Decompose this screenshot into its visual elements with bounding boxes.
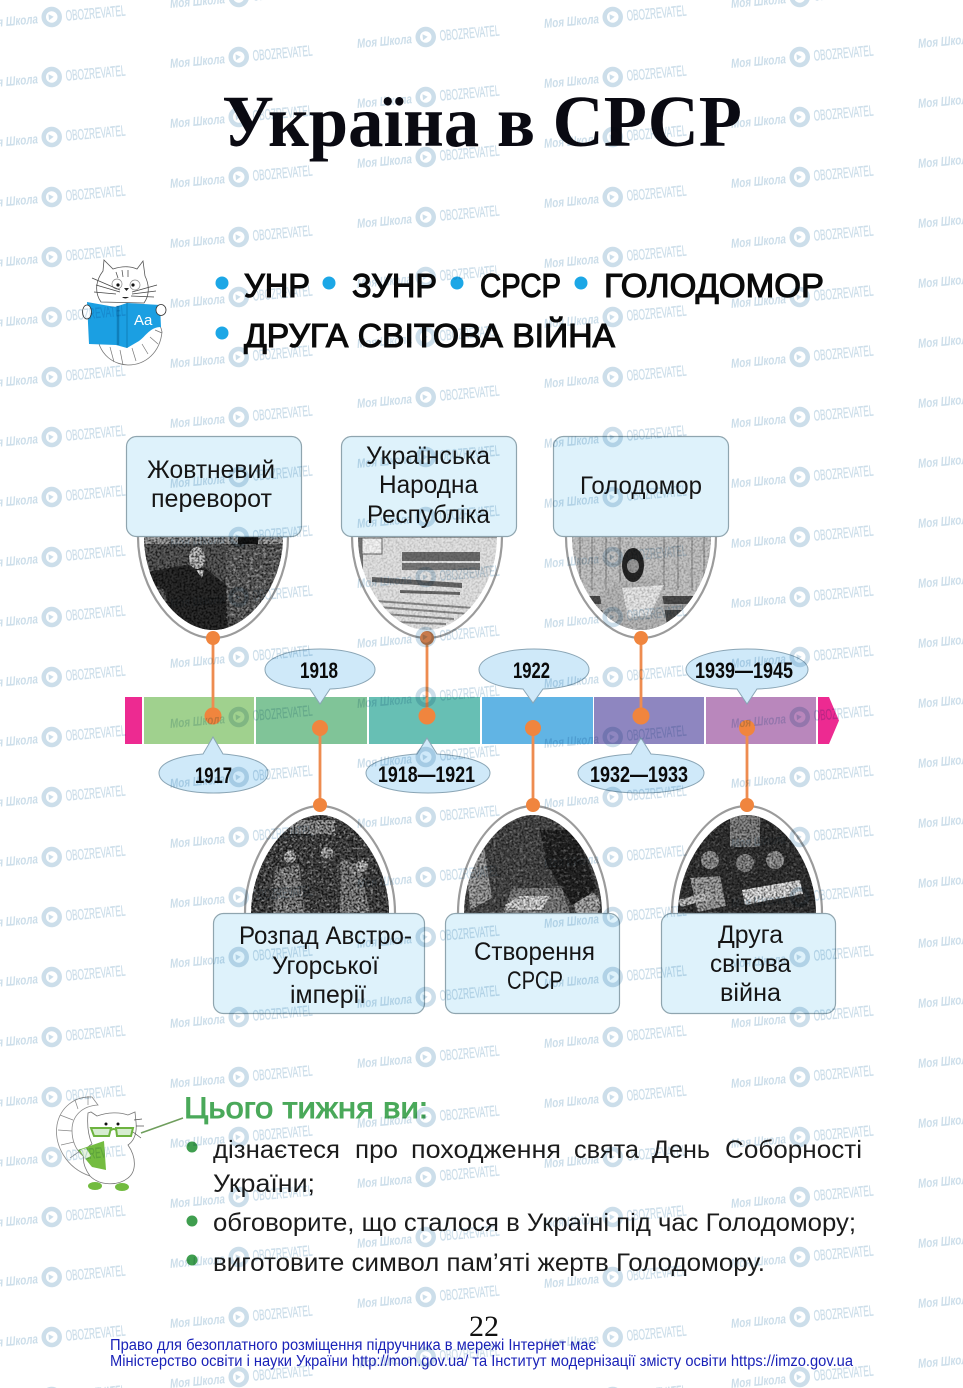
title: Україна в СРСР <box>222 81 742 162</box>
date bubble: 1932–1933 <box>578 738 704 793</box>
keyword list: ЗУНР <box>352 267 437 304</box>
keyword list: ГОЛОДОМОР <box>604 267 824 304</box>
date bubble: 1918: 1918 <box>300 658 338 683</box>
bullet: first goal <box>186 1136 862 1198</box>
label box: Розпад Австро-Угорської імперії: Розпад Австро- <box>239 922 412 950</box>
label box: Друга світова війна: світова <box>710 950 791 978</box>
date bubble: 1939–1945 <box>686 649 808 704</box>
label box: Створення СРСР: Створення <box>474 938 595 966</box>
date bubble: 1917 <box>159 737 268 793</box>
label box: Розпад Австро-Угорської імперії: імперії <box>290 981 366 1009</box>
connector: 1918 <box>312 720 328 812</box>
keyword list: СРСР <box>480 267 561 304</box>
date bubble: 1918–1921 <box>366 738 490 793</box>
photo: Ukrainian People's Republic newspaper <box>352 530 502 638</box>
footer notice: Право для безоплатного розміщення підручника в мережі Інтернет має <box>110 1337 596 1354</box>
label box: Створення СРСР <box>446 914 620 1014</box>
bullet: second goal: обговорите, що сталося в Україні під час Голодомору; <box>213 1209 856 1237</box>
bullet: first goal: Соборності <box>725 1136 862 1164</box>
photo: Second World War soldiers <box>672 806 822 920</box>
label box: Українська Народна Республіка: Республіка <box>367 501 490 529</box>
label box: Жовтневий переворот <box>126 436 302 536</box>
photo: Holodomor child <box>566 530 716 638</box>
footer notice: Міністерство освіти і науки України http://mon.gov.ua/ та Інститут модернізації змісту освіти https://imzo.gov.ua <box>110 1353 853 1370</box>
bullet: first goal: свята <box>574 1136 639 1164</box>
label box: Друга світова війна: війна <box>720 979 781 1007</box>
label box: Українська Народна Республіка: Українська <box>366 442 490 470</box>
bullet: first goal: походження <box>411 1136 561 1164</box>
bullet: first goal: День <box>652 1136 710 1164</box>
date bubble: 1939–1945: 1939—1945 <box>695 658 793 683</box>
label box: Розпад Австро-Угорської імперії: Угорської <box>272 952 379 980</box>
icon: teacher cat with pointer <box>57 1096 183 1191</box>
footer notice <box>110 1337 853 1370</box>
bullet: first goal: України; <box>213 1170 315 1198</box>
label box: Жовтневий переворот: Жовтневий <box>147 456 275 484</box>
icon: reading cat with blue book: Aa <box>134 312 153 329</box>
timeline bar <box>125 697 839 744</box>
bullet: first goal: дізнаєтеся <box>213 1136 340 1164</box>
heading: this week: Цього тижня ви: <box>184 1092 428 1125</box>
page number: 22 <box>469 1310 499 1343</box>
date bubble: 1917: 1917 <box>195 763 232 788</box>
bullet: first goal: про <box>355 1136 398 1164</box>
date bubble: 1922: 1922 <box>513 658 550 683</box>
connector: 1918–1921 <box>418 631 436 724</box>
connector: 1922 <box>525 720 541 812</box>
label box: Друга світова війна: Друга <box>718 921 783 949</box>
keyword list: УНР <box>244 267 310 304</box>
label box: Голодомор <box>554 436 728 536</box>
label box: Голодомор: Голодомор <box>580 472 702 500</box>
connector: 1917 <box>204 631 222 724</box>
label box: Жовтневий переворот: переворот <box>151 485 273 513</box>
photo: collapse of Austria-Hungary <box>245 806 395 920</box>
connector: 1939–1945 <box>739 720 755 812</box>
date bubble: 1932–1933: 1932—1933 <box>590 762 688 787</box>
label box: Створення СРСР: СРСР <box>507 967 563 995</box>
keyword list: ДРУГА СВІТОВА ВІЙНА <box>244 317 615 354</box>
bullet: third goal: виготовите символ пам’яті жертв Голодомору. <box>213 1249 765 1277</box>
date bubble: 1918 <box>265 649 375 704</box>
label box: Розпад Австро-Угорської імперії <box>214 914 424 1014</box>
date bubble: 1922 <box>479 649 589 703</box>
keyword list <box>216 267 824 354</box>
label box: Українська Народна Республіка <box>342 436 516 536</box>
date bubble: 1918–1921: 1918—1921 <box>378 762 475 787</box>
photo: creation of the USSR <box>458 806 608 920</box>
photo: October coup <box>138 530 290 638</box>
label box: Українська Народна Республіка: Народна <box>379 471 478 499</box>
label box: Друга світова війна <box>662 914 836 1014</box>
connector: 1932–1933 <box>632 631 650 724</box>
icon: reading cat with blue book <box>82 260 166 365</box>
